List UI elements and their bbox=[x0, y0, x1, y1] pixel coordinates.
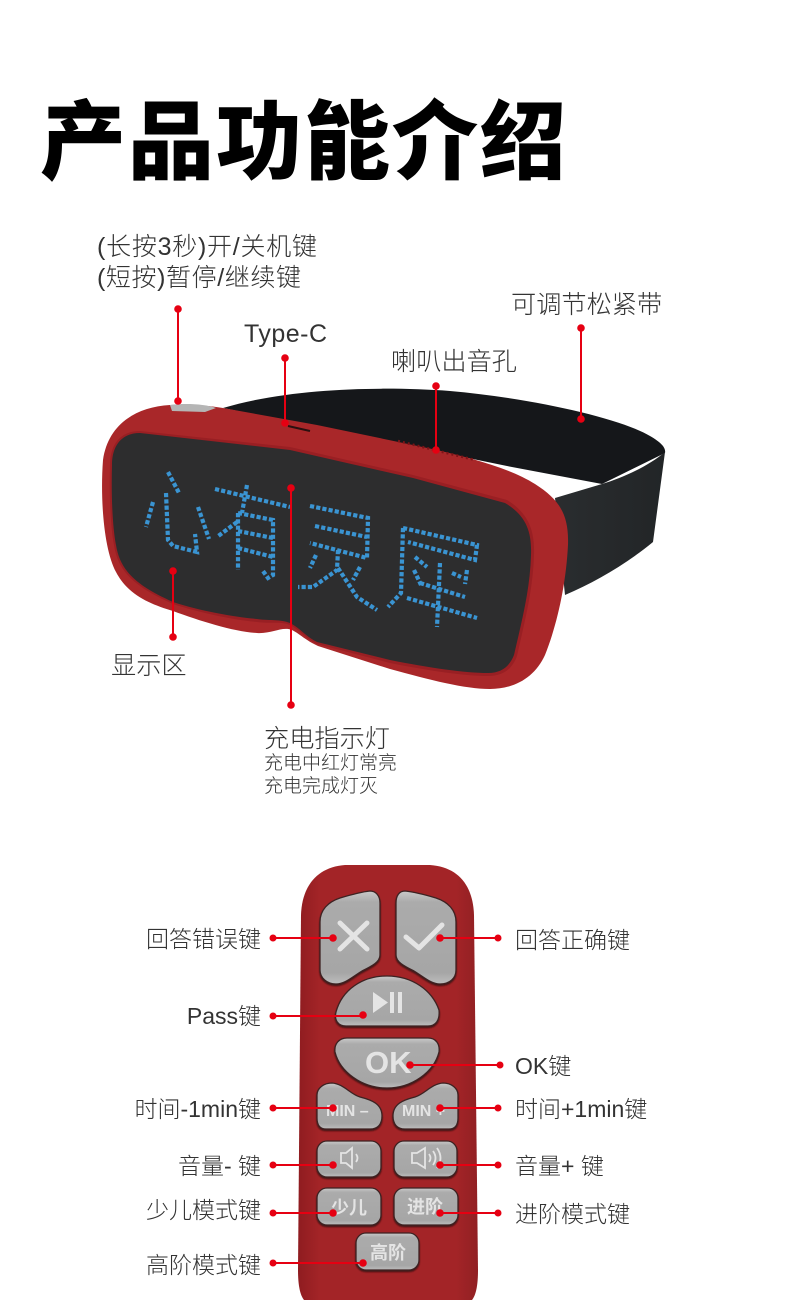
label: charging indicator: 充电指示灯 bbox=[264, 725, 390, 753]
icon: check bbox=[406, 925, 442, 948]
remote labels left: 回答错误键 bbox=[146, 926, 261, 952]
remote labels left: 少儿模式键 bbox=[146, 1197, 261, 1223]
button: wrong bbox=[320, 891, 380, 984]
LED text bbox=[146, 472, 477, 627]
icon: MIN minus: MIN – bbox=[326, 1103, 369, 1120]
label: charging indicator: 充电中红灯常亮 bbox=[264, 752, 397, 774]
title: 产品功能介绍 bbox=[40, 95, 566, 191]
product: eye mask with strap bbox=[102, 389, 665, 689]
icon: OK text: OK bbox=[365, 1045, 412, 1080]
button: OK bbox=[335, 1038, 439, 1088]
mask inner rim bbox=[110, 431, 534, 676]
label: charging indicator: 充电完成灯灭 bbox=[264, 775, 378, 797]
mask display screen bbox=[112, 433, 531, 673]
icon: speaker high bbox=[412, 1148, 440, 1168]
remote labels left: 音量- 键 bbox=[178, 1153, 261, 1179]
button: plus one minute bbox=[393, 1083, 458, 1129]
button: play pause bbox=[335, 976, 439, 1026]
remote labels left: 高阶模式键 bbox=[146, 1252, 261, 1278]
button: advanced mode bbox=[394, 1188, 458, 1225]
type-c port bbox=[288, 426, 310, 431]
remote labels right bbox=[515, 927, 647, 1227]
callout leader lines bbox=[169, 305, 585, 1267]
icon: play pause bbox=[373, 992, 402, 1013]
speaker holes bbox=[398, 441, 475, 460]
label: display area: 显示区 bbox=[111, 652, 187, 680]
remote labels right: 回答正确键 bbox=[515, 927, 630, 953]
button: expert mode bbox=[356, 1233, 419, 1270]
icon: expert mode text: 高阶 bbox=[370, 1242, 406, 1263]
icon: speaker low bbox=[341, 1148, 358, 1168]
remote control bbox=[298, 865, 478, 1300]
label: power key bbox=[97, 233, 317, 292]
label: type-c: Type-C bbox=[244, 320, 327, 348]
strap front band bbox=[555, 452, 665, 595]
remote labels right: OK键 bbox=[515, 1053, 571, 1079]
button: child mode bbox=[317, 1188, 381, 1225]
remote labels right: 进阶模式键 bbox=[515, 1201, 630, 1227]
power button bbox=[170, 404, 216, 412]
icon: cross bbox=[340, 923, 367, 949]
label: adjustable strap: 可调节松紧带 bbox=[511, 291, 662, 319]
label: power key: (短按)暂停/继续键 bbox=[97, 264, 301, 292]
button: correct bbox=[396, 891, 456, 984]
icon: child mode text: 少儿 bbox=[331, 1198, 367, 1218]
button: volume down bbox=[317, 1141, 381, 1177]
remote body bbox=[298, 865, 478, 1300]
remote labels right: 时间+1min键 bbox=[515, 1096, 647, 1122]
remote labels left: 时间-1min键 bbox=[134, 1096, 261, 1122]
button: volume up bbox=[394, 1141, 457, 1177]
label: speaker holes: 喇叭出音孔 bbox=[391, 348, 517, 376]
icon: advanced mode text: 进阶 bbox=[407, 1196, 443, 1217]
label: power key: (长按3秒)开/关机键 bbox=[97, 233, 317, 261]
icon: MIN plus: MIN + bbox=[402, 1103, 445, 1120]
remote labels right: 音量+ 键 bbox=[515, 1153, 604, 1179]
remote labels left bbox=[134, 926, 261, 1278]
mask red frame bbox=[102, 405, 568, 689]
strap back band bbox=[223, 389, 665, 484]
button: minus one minute bbox=[317, 1083, 382, 1129]
remote labels left: Pass键 bbox=[187, 1003, 261, 1029]
label: charging indicator bbox=[264, 725, 397, 797]
